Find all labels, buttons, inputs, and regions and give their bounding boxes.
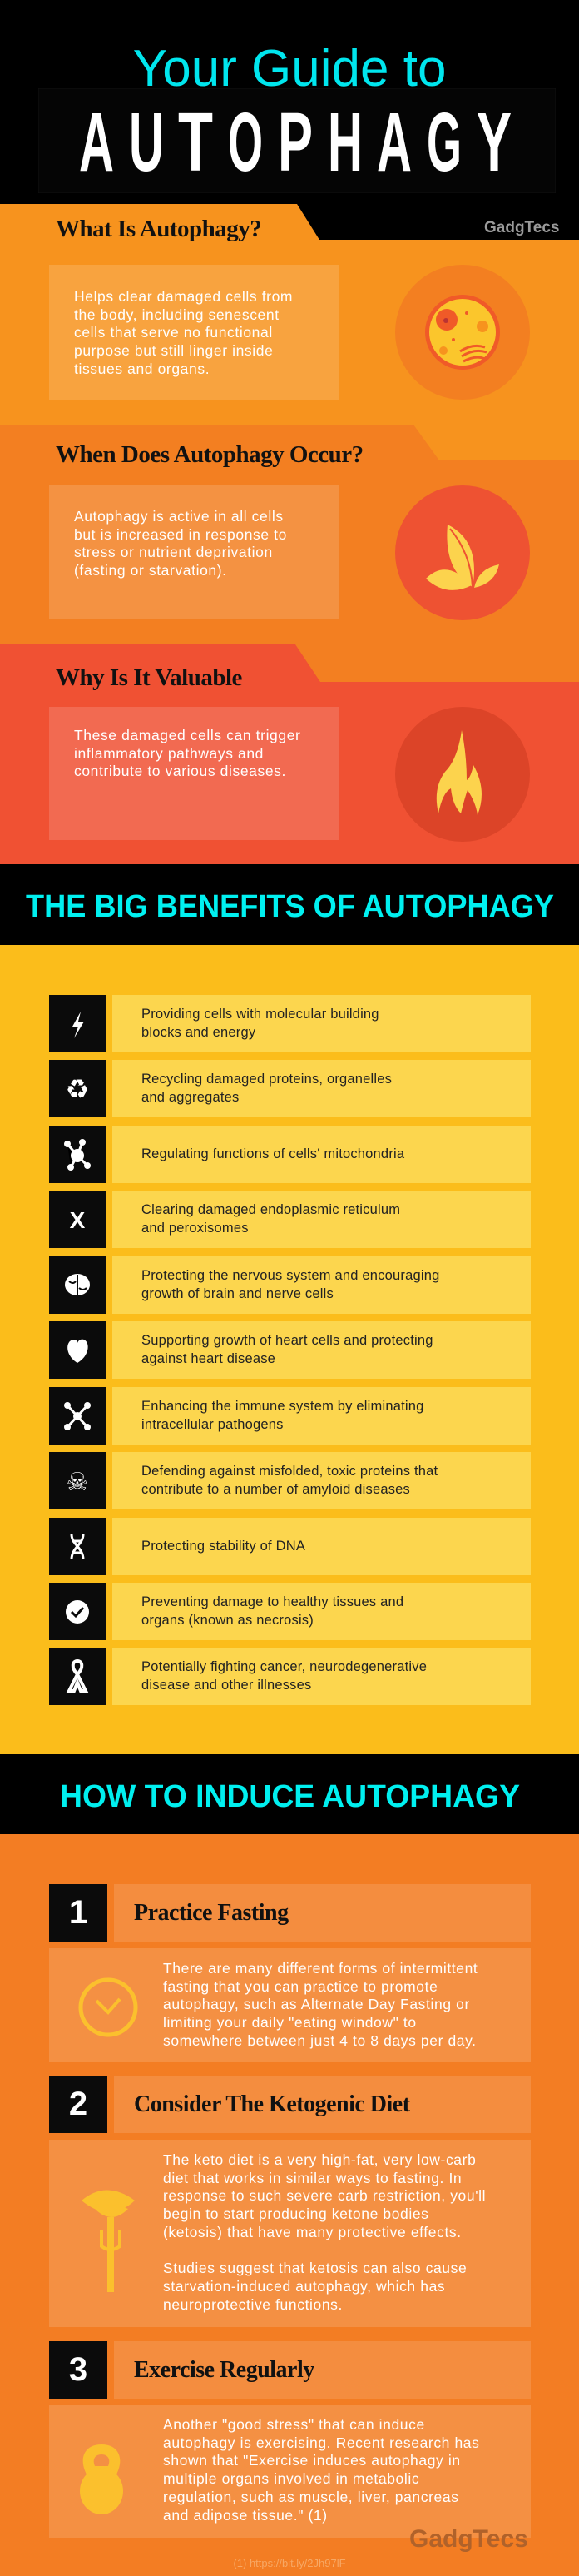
- heading: how to induce: HOW TO INDUCE AUTOPHAGY: [60, 1779, 520, 1814]
- panel: what is autophagy: [0, 204, 579, 429]
- step 2: (ketosis) that have many protective effects.: [163, 2224, 462, 2240]
- panel: when does autophagy occur: but is increased in response to: [74, 526, 287, 543]
- benefit 7: intracellular pathogens: [141, 1417, 284, 1432]
- benefit 3: [49, 1126, 531, 1183]
- step 3: multiple organs involved in metabolic: [163, 2470, 419, 2487]
- icon: flame: [395, 707, 530, 842]
- benefit 11: Potentially fighting cancer, neurodegenerative: [141, 1659, 427, 1674]
- benefit 9: Protecting stability of DNA: [141, 1539, 305, 1554]
- icon: clock: [78, 1978, 138, 2036]
- heading: how to induce: [0, 1754, 579, 1834]
- panel: when does autophagy occur: [0, 425, 579, 649]
- step 1: somewhere between just 4 to 8 days per day.: [163, 2032, 477, 2049]
- benefit 5: growth of brain and nerve cells: [141, 1286, 334, 1300]
- benefit 6: [49, 1321, 531, 1379]
- step 1: There are many different forms of intermittent: [163, 1960, 478, 1977]
- logo: GadgTecs: [484, 219, 559, 236]
- heading: big benefits: [0, 864, 579, 945]
- benefit 5: Protecting the nervous system and encouraging: [141, 1268, 439, 1283]
- step 2: begin to start producing ketone bodies: [163, 2206, 429, 2222]
- step 3: Exercise Regularly: [134, 2356, 314, 2383]
- step 3: Another "good stress" that can induce: [163, 2416, 425, 2433]
- panel: why is it valuable: inflammatory pathways and: [74, 745, 264, 762]
- panel: why is it valuable: [0, 644, 579, 864]
- title line 2: A: [377, 96, 412, 189]
- benefit 8: Defending against misfolded, toxic proteins that: [141, 1464, 438, 1479]
- icon: cell: [395, 265, 530, 400]
- benefit 4: [49, 1191, 531, 1248]
- benefit 2: ♻: [66, 1073, 89, 1105]
- benefit 6: Supporting growth of heart cells and protecting: [141, 1333, 433, 1348]
- step 2: The keto diet is a very high-fat, very low-carb: [163, 2151, 476, 2168]
- panel: what is autophagy: Helps clear damaged cells from: [74, 288, 293, 305]
- title line 2: A: [79, 96, 114, 189]
- panel: when does autophagy occur: stress or nutrient deprivation: [74, 544, 273, 560]
- benefit 4: and peroxisomes: [141, 1221, 249, 1236]
- benefit 1: Providing cells with molecular building: [141, 1007, 379, 1022]
- benefit 1: [49, 995, 531, 1052]
- icon: leaves: [395, 485, 530, 620]
- step 3: regulation, such as muscle, liver, pancreas: [163, 2489, 459, 2505]
- heading: Why Is It Valuable: [56, 664, 242, 691]
- panel: what is autophagy: cells that serve no functional: [74, 324, 273, 341]
- step 1: autophagy, such as Alternate Day Fasting or: [163, 1996, 470, 2012]
- step 2: Consider The Ketogenic Diet: [134, 2091, 410, 2116]
- benefit 7: [49, 1387, 531, 1445]
- title line 2: H: [328, 96, 363, 189]
- step 2: starvation-induced autophagy, which has: [163, 2278, 445, 2295]
- title line 2: T: [178, 96, 213, 189]
- logo: GadgTecs: [409, 2525, 528, 2553]
- step 2: 2: [69, 2086, 87, 2122]
- panel: when does autophagy occur: Autophagy is active in all cells: [74, 508, 284, 525]
- step 3: autophagy is exercising. Recent research has: [163, 2434, 479, 2451]
- benefit 11: disease and other illnesses: [141, 1677, 311, 1692]
- panel: what is autophagy: purpose but still linger inside: [74, 342, 273, 359]
- benefit 9: [49, 1518, 531, 1575]
- heading: When Does Autophagy Occur?: [56, 441, 364, 468]
- title line 2: [38, 88, 556, 193]
- benefit 2: Recycling damaged proteins, organelles: [141, 1072, 392, 1087]
- footnote: (1) https://bit.ly/2Jh97lF: [233, 2557, 346, 2569]
- text block: [49, 485, 339, 619]
- benefit 2: and aggregates: [141, 1089, 239, 1104]
- step 3: shown that "Exercise induces autophagy in: [163, 2452, 461, 2469]
- step 1: [49, 1884, 531, 2062]
- benefit 2: [49, 1060, 531, 1117]
- benefit 8: [49, 1452, 531, 1509]
- benefit 8: ☠: [67, 1468, 88, 1497]
- benefit 3: Regulating functions of cells' mitochondria: [141, 1146, 404, 1161]
- benefit 11: [49, 1648, 531, 1705]
- text block: [49, 265, 339, 400]
- heading: big benefits: THE BIG BENEFITS OF AUTOPHAGY: [26, 889, 554, 924]
- step 3: and adipose tissue." (1): [163, 2507, 328, 2524]
- benefit 4: X: [70, 1207, 86, 1233]
- step 3: 3: [69, 2351, 87, 2388]
- panel: what is autophagy: tissues and organs.: [74, 361, 210, 377]
- title line 2: Y: [477, 96, 512, 189]
- benefit 7: Enhancing the immune system by eliminating: [141, 1399, 423, 1414]
- header: title: [0, 0, 579, 241]
- step 2: [49, 2076, 531, 2327]
- benefit 10: Preventing damage to healthy tissues and: [141, 1594, 403, 1609]
- heading: What Is Autophagy?: [56, 216, 261, 242]
- step 2: response to such severe carb restriction, you'll: [163, 2187, 486, 2204]
- panel: benefits list: [0, 945, 579, 1754]
- title line 2: P: [278, 96, 313, 189]
- step 2: neuroprotective functions.: [163, 2296, 343, 2313]
- panel: when does autophagy occur: (fasting or starvation).: [74, 562, 227, 579]
- panel: what is autophagy: the body, including senescent: [74, 306, 280, 323]
- step 1: Practice Fasting: [134, 1900, 289, 1925]
- title line 2: G: [427, 96, 462, 189]
- icon: fork with leaf: [82, 2190, 135, 2292]
- panel: why is it valuable: These damaged cells can trigger: [74, 727, 301, 743]
- benefit 6: against heart disease: [141, 1350, 275, 1365]
- title line 2: O: [228, 96, 263, 189]
- panel: induce steps: [0, 1834, 579, 2576]
- benefit 10: organs (known as necrosis): [141, 1612, 314, 1627]
- benefit 5: [49, 1256, 531, 1314]
- text block: [49, 707, 339, 840]
- icon: kettlebell: [80, 2444, 123, 2514]
- benefit 10: [49, 1583, 531, 1640]
- benefit 8: contribute to a number of amyloid diseases: [141, 1482, 410, 1497]
- panel: why is it valuable: contribute to various diseases.: [74, 763, 286, 779]
- step 2: diet that works in similar ways to fasting. In: [163, 2170, 462, 2186]
- step 1: 1: [69, 1894, 87, 1931]
- step 2: Studies suggest that ketosis can also cause: [163, 2260, 467, 2276]
- step 1: fasting that you can practice to promote: [163, 1978, 438, 1995]
- step 1: limiting your daily "eating window" to: [163, 2014, 417, 2031]
- title line 2: U: [129, 96, 164, 189]
- title line 1: Your Guide to: [133, 40, 446, 97]
- benefit 4: Clearing damaged endoplasmic reticulum: [141, 1202, 400, 1217]
- step 3: [49, 2341, 531, 2538]
- benefit 1: blocks and energy: [141, 1024, 255, 1039]
